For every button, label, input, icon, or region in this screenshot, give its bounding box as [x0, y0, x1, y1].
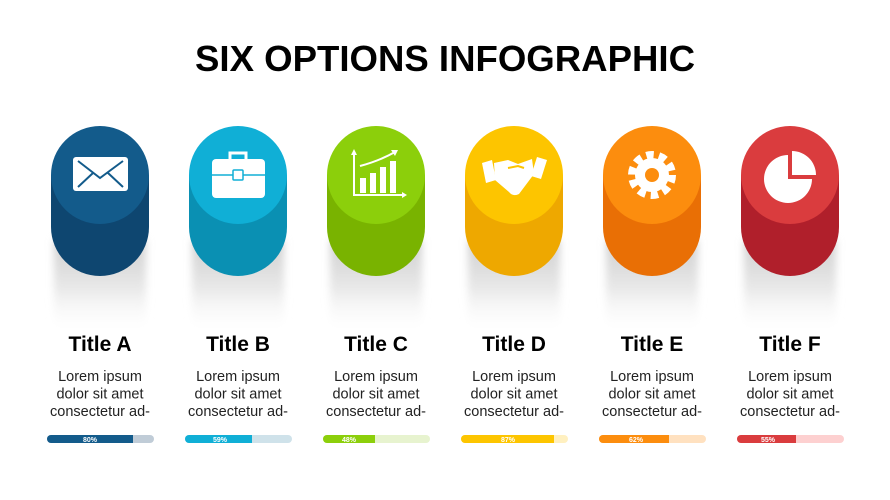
progress B 59%: 59%	[213, 437, 228, 444]
text A: dolor sit amet	[56, 386, 144, 402]
progress A 80%: 80%	[83, 437, 98, 444]
title F: Title F	[759, 333, 821, 356]
icon: chart	[351, 149, 407, 198]
cylinder B	[189, 126, 287, 276]
cylinder D	[465, 126, 563, 276]
text F: Lorem ipsum	[748, 369, 832, 385]
shadow C	[330, 240, 422, 335]
text D: consectetur ad-	[464, 404, 564, 420]
progress C 48%: 48%	[342, 437, 357, 444]
option B	[185, 126, 292, 444]
text F: consectetur ad-	[740, 404, 840, 420]
cylinder E	[603, 126, 701, 276]
icon: pie chart	[764, 151, 816, 203]
title D: Title D	[482, 333, 546, 356]
progress F 55%	[737, 435, 844, 444]
title C: Title C	[344, 333, 408, 356]
icon: envelope	[73, 157, 128, 191]
option A	[47, 126, 154, 444]
option E	[599, 126, 706, 444]
text A: Lorem ipsum	[58, 369, 142, 385]
text C: dolor sit amet	[332, 386, 420, 402]
progress C 48%	[323, 435, 430, 444]
title A: Title A	[68, 333, 132, 356]
progress F 55%: 55%	[761, 437, 776, 444]
cylinder F	[741, 126, 839, 276]
icon: briefcase	[212, 153, 265, 198]
option F	[737, 126, 844, 444]
progress B 59%	[185, 435, 292, 444]
cylinder A	[51, 126, 149, 276]
text E: Lorem ipsum	[610, 369, 694, 385]
progress D 87%: 87%	[501, 437, 516, 444]
text B: Lorem ipsum	[196, 369, 280, 385]
option C	[323, 126, 430, 444]
title: SIX OPTIONS INFOGRAPHIC	[195, 38, 695, 79]
text F: dolor sit amet	[746, 386, 834, 402]
progress E 62%	[599, 435, 706, 444]
text A: consectetur ad-	[50, 404, 150, 420]
text C: Lorem ipsum	[334, 369, 418, 385]
title B: Title B	[206, 333, 270, 356]
title E: Title E	[621, 333, 683, 356]
shadow E	[606, 240, 698, 335]
progress D 87%	[461, 435, 568, 444]
shadow B	[192, 240, 284, 335]
shadow A	[54, 240, 146, 335]
text B: consectetur ad-	[188, 404, 288, 420]
shadow D	[468, 240, 560, 335]
text B: dolor sit amet	[194, 386, 282, 402]
text D: Lorem ipsum	[472, 369, 556, 385]
cylinder C	[327, 126, 425, 276]
progress A 80%	[47, 435, 154, 444]
icon: gear	[633, 156, 671, 194]
text D: dolor sit amet	[470, 386, 558, 402]
progress E 62%: 62%	[629, 437, 644, 444]
text E: dolor sit amet	[608, 386, 696, 402]
text E: consectetur ad-	[602, 404, 702, 420]
text C: consectetur ad-	[326, 404, 426, 420]
shadow F	[744, 240, 836, 335]
icon: handshake	[482, 157, 547, 195]
option D	[461, 126, 568, 444]
